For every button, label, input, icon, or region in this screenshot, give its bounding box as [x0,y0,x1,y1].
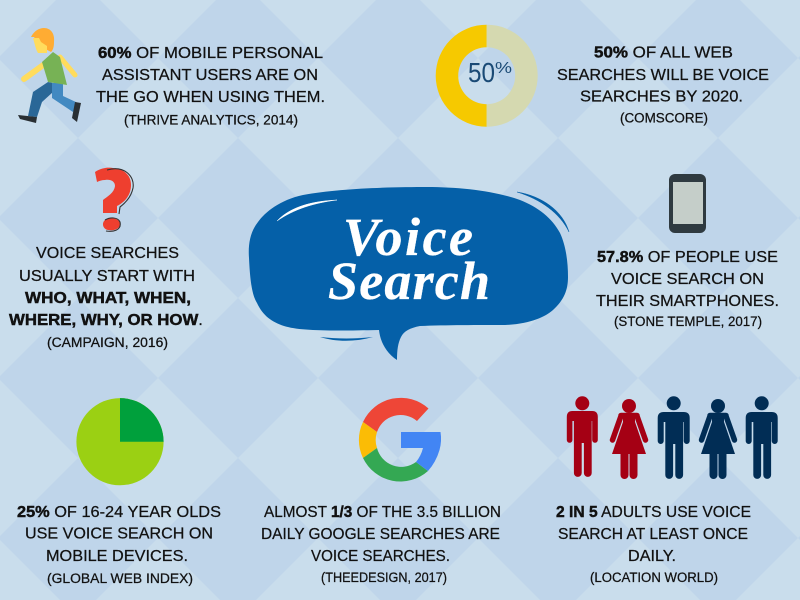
icon: Google G [359,398,441,482]
text: 50 percent of searches statistic: SEARCHES BY 2020. [580,89,743,106]
text: 16-24 year olds statistic: MOBILE DEVICES. [46,548,188,565]
icon: running person [18,28,81,123]
text: Google searches statistic: (THEEDESIGN, 2017) [321,570,447,585]
icon: row of five people [567,396,778,479]
title [328,207,490,311]
text: smartphone statistic: THEIR SMARTPHONES. [596,293,779,310]
text: Google searches statistic: ALMOST 1/3 OF THE 3.5 BILLION [264,504,501,521]
chart: 25% pie [76,398,164,485]
text: question words statistic [9,245,203,350]
text: daily adults statistic: DAILY. [628,548,676,565]
text: on the go statistic: ASSISTANT USERS ARE ON [102,67,318,84]
text: daily adults statistic: SEARCH AT LEAST ONCE [558,526,748,543]
chart: 50% donut: % [495,60,512,77]
text: 16-24 year olds statistic: USE VOICE SEARCH ON [25,526,213,542]
speech bubble with title [249,187,569,360]
title: Search [328,251,490,311]
icon: smartphone [669,174,706,233]
text: daily adults statistic [556,504,751,585]
text: Google searches statistic [261,504,501,585]
text: on the go statistic: 60% OF MOBILE PERSONAL [98,45,323,62]
text: smartphone statistic: VOICE SEARCH ON [611,271,764,288]
icon: question mark [95,168,133,231]
text: on the go statistic: (THRIVE ANALYTICS, 2014) [124,112,298,128]
text: 50 percent of searches statistic [557,45,769,126]
text: Google searches statistic: DAILY GOOGLE SEARCHES ARE [261,526,500,543]
text: daily adults statistic: (LOCATION WORLD) [590,570,718,585]
text: 50 percent of searches statistic: 50% OF ALL WEB [594,45,733,62]
text: 50 percent of searches statistic: (COMSCORE) [620,111,708,126]
text: 50 percent of searches statistic: SEARCHES WILL BE VOICE [557,67,769,84]
text: question words statistic: WHERE, WHY, OR HOW . [9,312,203,329]
text: on the go statistic [96,45,325,128]
person: man navy right [746,396,778,479]
text: question words statistic: WHO, WHAT, WHEN, [25,290,191,307]
bottom accent line [320,337,373,341]
white highlight [277,200,337,221]
text: question words statistic: (CAMPAIGN, 2016) [47,335,168,350]
chart: 50% donut: 50 [468,57,495,88]
text: Google searches statistic: VOICE SEARCHES. [311,548,450,565]
person: man red [567,396,598,477]
text: question words statistic: USUALLY START WITH [19,268,195,285]
text: smartphone statistic: (STONE TEMPLE, 2017) [614,314,762,329]
title: Voice [343,207,473,267]
person: woman red [612,399,646,479]
text: 16-24 year olds statistic [17,504,221,586]
person: man navy [658,396,690,479]
text: smartphone statistic: 57.8% OF PEOPLE USE [597,249,778,266]
top right accent arc [517,192,569,232]
text: on the go statistic: THE GO WHEN USING THEM. [96,89,325,106]
text: question words statistic: VOICE SEARCHES [36,245,179,262]
bubble shape [249,187,568,360]
text: smartphone statistic [596,249,779,329]
text: daily adults statistic: 2 IN 5 ADULTS USE VOICE [556,504,751,521]
text: 16-24 year olds statistic: 25% OF 16-24 YEAR OLDS [17,504,221,521]
chart: 50% donut [436,25,538,127]
text: 16-24 year olds statistic: (GLOBAL WEB INDEX) [47,571,193,586]
person: woman navy [701,399,735,479]
